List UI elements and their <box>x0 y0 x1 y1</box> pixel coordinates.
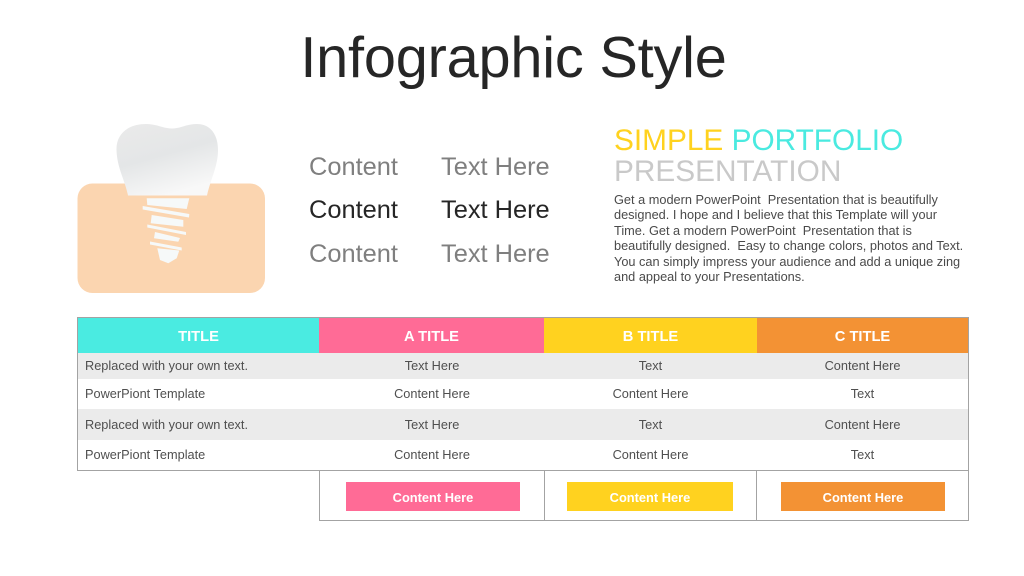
header: C title: C TITLE <box>835 329 890 345</box>
row 3 C: Content Here <box>825 417 900 432</box>
header: B title <box>544 318 757 353</box>
tooth crown <box>116 124 218 196</box>
row 1 value: Text Here <box>441 153 550 181</box>
zebra row 1 <box>78 353 968 379</box>
row 4 A: Content Here <box>394 447 470 462</box>
header: A title <box>319 318 544 353</box>
row 3 B: Text <box>639 417 662 432</box>
button: B <box>567 482 733 511</box>
icon: dental implant <box>78 124 265 293</box>
row 1 label: Content <box>309 153 398 181</box>
heading: simple portfolio presentation <box>614 124 903 188</box>
header: title: TITLE <box>178 329 219 345</box>
heading: simple portfolio presentation: SIMPLE PORTFOLIO <box>614 124 903 157</box>
button: A <box>346 482 520 511</box>
row 2 label: Content <box>309 196 398 224</box>
heading: simple portfolio presentation: PRESENTATION <box>614 155 841 188</box>
title: Infographic Style <box>300 26 727 90</box>
description text: and appeal to your Presentations. <box>614 269 805 284</box>
description text: designed. I hope and I believe that this Template will your <box>614 207 937 222</box>
row 3 A: Text Here <box>405 417 459 432</box>
button: C: Content Here <box>823 490 903 505</box>
header: B title: B TITLE <box>623 329 678 345</box>
row 4 C: Text <box>851 447 874 462</box>
header: title <box>78 318 319 353</box>
description text: Time. Get a modern PowerPoint Presentation that is <box>614 223 912 238</box>
implant screw <box>143 198 189 263</box>
key-value list <box>309 153 550 268</box>
row 2 C: Text <box>851 386 874 401</box>
button: B: Content Here <box>610 490 690 505</box>
row 2 label: PowerPiont Template <box>85 386 205 401</box>
row 1 C: Content Here <box>825 358 900 373</box>
button: A: Content Here <box>393 490 473 505</box>
row 1 B: Text <box>639 358 662 373</box>
description text: beautifully designed. Easy to change colors, photos and Text. <box>614 238 963 253</box>
header: A title: A TITLE <box>404 329 459 345</box>
row 3 label: Replaced with your own text. <box>85 417 248 432</box>
description text: Get a modern PowerPoint Presentation that is beautifully <box>614 192 938 207</box>
button: C <box>781 482 945 511</box>
gum <box>78 184 265 293</box>
header: C title <box>757 318 968 353</box>
row 3 label: Content <box>309 240 398 268</box>
zebra row 3 <box>78 409 968 440</box>
row 2 A: Content Here <box>394 386 470 401</box>
description text: You can simply impress your audience and add a unique zing <box>614 254 960 269</box>
row 2 value: Text Here <box>441 196 550 224</box>
row 4 label: PowerPiont Template <box>85 447 205 462</box>
row 1 label: Replaced with your own text. <box>85 358 248 373</box>
row 4 B: Content Here <box>613 447 688 462</box>
row 1 A: Text Here <box>405 358 459 373</box>
row 3 value: Text Here <box>441 240 550 268</box>
description text <box>614 192 963 284</box>
row 2 B: Content Here <box>613 386 688 401</box>
